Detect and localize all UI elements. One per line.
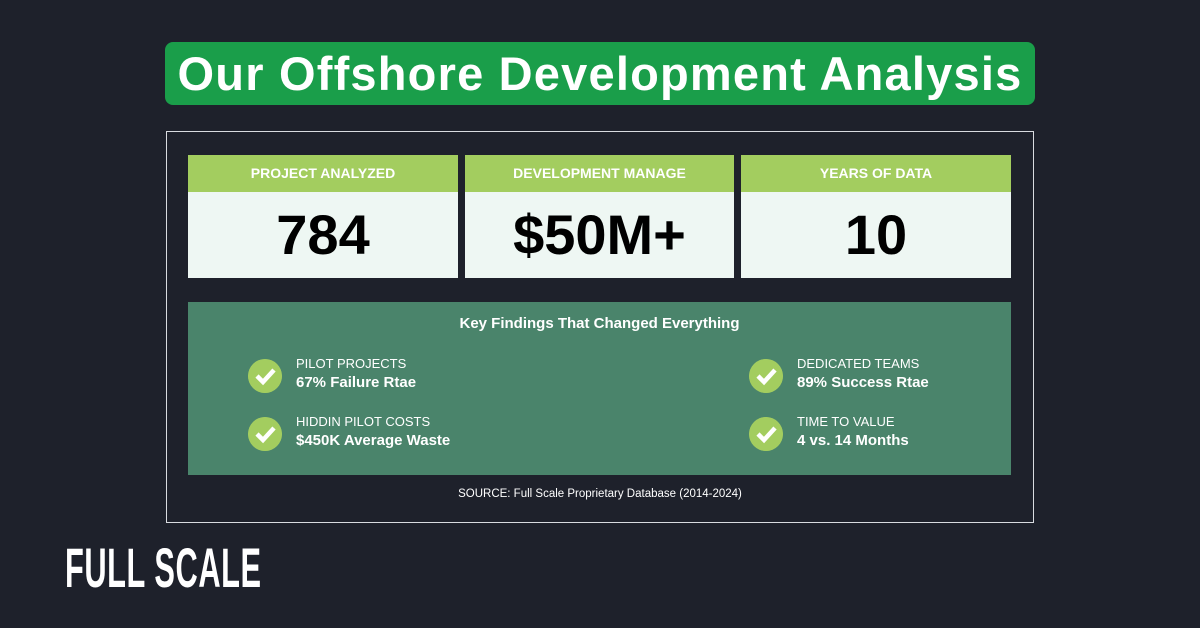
finding: dedicated teams: DEDICATED TEAMS: [797, 356, 919, 371]
finding: dedicated teams: 89% Success Rtae: [797, 374, 929, 391]
source note: SOURCE: Full Scale Proprietary Database (2014-2024): [458, 488, 742, 500]
panel: analysis frame: [166, 131, 1034, 523]
stat: projects analyzed: 784: [276, 203, 370, 266]
stat: years of data: YEARS OF DATA: [820, 165, 932, 181]
stat: development managed: [465, 155, 734, 278]
finding: pilot projects: [248, 356, 416, 393]
finding: pilot projects: 67% Failure Rtae: [296, 374, 416, 391]
finding: pilot projects: PILOT PROJECTS: [296, 356, 406, 371]
logo: FULL SCALE: [65, 536, 262, 599]
finding: time to value: TIME TO VALUE: [797, 414, 895, 429]
findings heading: Key Findings That Changed Everything: [459, 315, 740, 332]
stat: years of data: [741, 155, 1011, 278]
stat: development managed: $50M+: [513, 203, 686, 266]
stat: projects analyzed: PROJECT ANALYZED: [251, 165, 395, 181]
stat: projects analyzed: [188, 155, 458, 278]
panel: key findings: [188, 302, 1011, 475]
stat: years of data: 10: [845, 203, 907, 266]
finding: dedicated teams: [749, 356, 929, 393]
title: Our Offshore Development Analysis: [178, 47, 1022, 100]
finding: hidden pilot costs: HIDDIN PILOT COSTS: [296, 414, 430, 429]
finding: time to value: 4 vs. 14 Months: [797, 432, 909, 449]
stat: development managed: DEVELOPMENT MANAGE: [513, 165, 686, 181]
finding: hidden pilot costs: [248, 414, 450, 451]
finding: time to value: [749, 414, 909, 451]
finding: hidden pilot costs: $450K Average Waste: [296, 432, 450, 449]
